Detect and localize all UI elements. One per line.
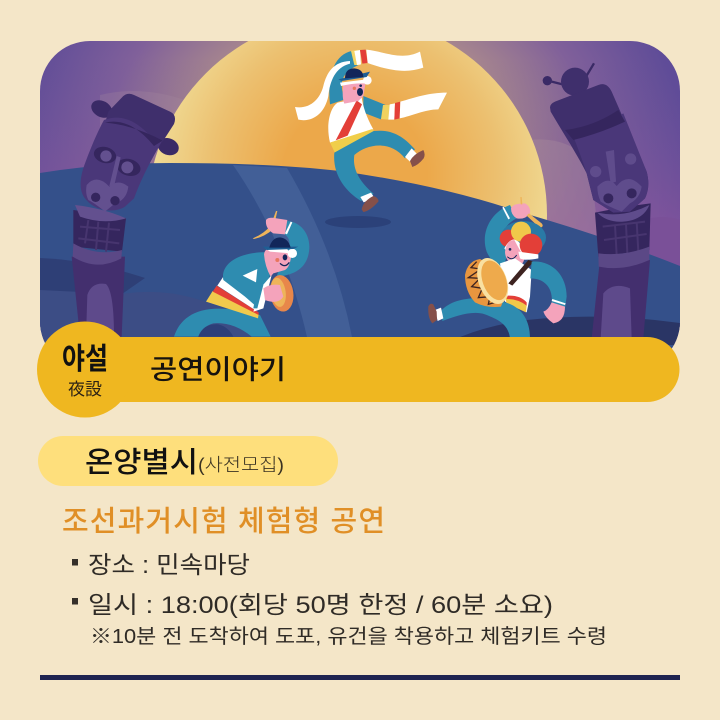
note: ※10분 전 도착하여 도포, 유건을 착용하고 체험키트 수령 [90, 625, 607, 648]
place: 장소 : 민속마당 [88, 552, 250, 579]
left totem [72, 94, 181, 337]
pill title: 온양별시 [85, 446, 198, 479]
orange heading: 조선과거시험 체험형 공연 [62, 505, 385, 538]
panel: illustration [40, 41, 680, 348]
details list [72, 552, 607, 648]
sky background [40, 41, 680, 371]
back hills [100, 91, 680, 270]
main hill [40, 163, 680, 348]
bullet [72, 598, 78, 604]
badge korean text: 야설 [62, 334, 108, 378]
dancer shadow [325, 216, 391, 228]
full moon [154, 41, 547, 220]
light band on hill [233, 165, 352, 337]
bullet [72, 559, 78, 566]
circle badge [37, 322, 133, 418]
bar shape [85, 337, 680, 402]
lower right dark hill [460, 317, 680, 345]
bottom rule [40, 675, 680, 680]
dancer: cymbal player [174, 211, 309, 337]
subtitle pill [38, 436, 338, 486]
right totem [543, 63, 651, 338]
dancer: top jumping [295, 50, 447, 212]
badge hanja text: 夜設 [68, 375, 102, 400]
time: 일시 : 18:00(회당 50명 한정 / 60분 소요) [88, 592, 553, 619]
lower left dark hills [40, 258, 144, 342]
heading: 공연이야기 [150, 355, 286, 385]
pill note: (사전모집) [198, 455, 284, 475]
title bar [37, 322, 680, 418]
dancer: drummer [428, 197, 567, 338]
